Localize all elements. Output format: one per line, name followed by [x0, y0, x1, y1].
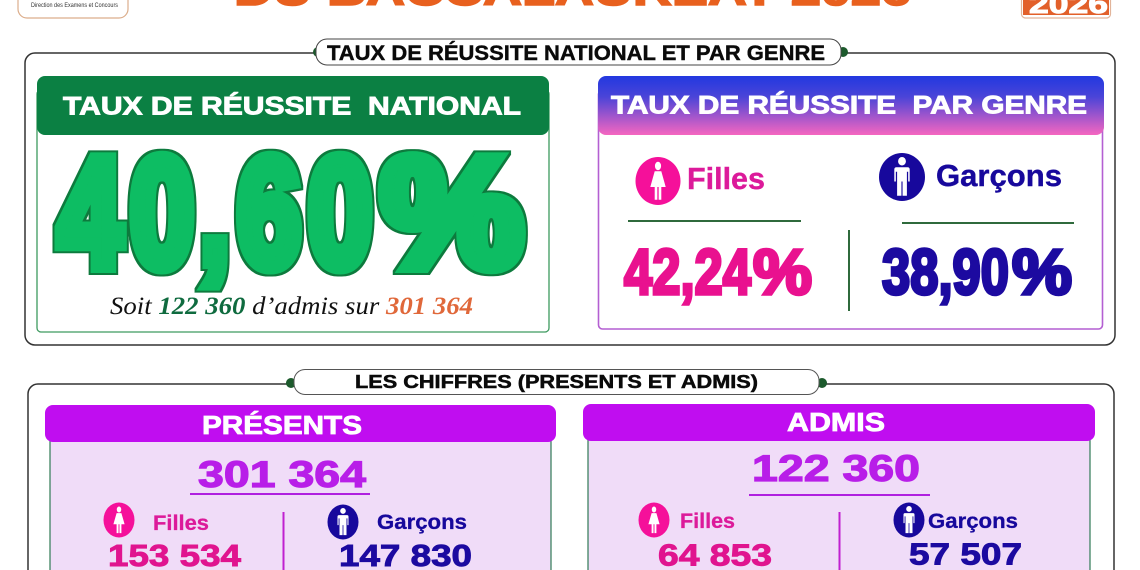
section heading: les chiffres	[286, 370, 827, 394]
icon: boy	[328, 504, 358, 540]
icon: boy	[879, 153, 925, 201]
label: garçons: Garçons	[928, 510, 1018, 533]
year badge	[1022, 0, 1110, 19]
admis header: ADMIS	[787, 407, 885, 437]
label: garçons: Garçons	[936, 158, 1062, 193]
panel: taux par genre	[598, 76, 1104, 329]
icon: girl	[104, 502, 134, 538]
label: filles: Filles	[680, 510, 735, 533]
national rate value	[58, 125, 523, 299]
logo card: Direction des Examens et Concours	[31, 3, 118, 9]
logo card	[18, 0, 128, 18]
national counts caption: Soit 122 360 d’admis sur 301 364	[110, 293, 473, 320]
panel: admis	[583, 404, 1095, 570]
admis header	[583, 404, 1095, 441]
panel: taux de réussite national et par genre	[25, 39, 1115, 345]
value: filles rate: 42,24	[624, 236, 751, 308]
label: filles: Filles	[153, 512, 209, 535]
national header	[37, 76, 549, 135]
admis total: 122 360	[752, 448, 920, 489]
panel: présents	[45, 405, 556, 570]
icon: girl	[638, 502, 670, 538]
section heading: les chiffres: LES CHIFFRES (PRESENTS ET ADMIS)	[355, 372, 758, 392]
section heading: taux de réussite: TAUX DE RÉUSSITE NATIONAL ET PAR GENRE	[327, 42, 825, 65]
panel: les chiffres	[28, 370, 1114, 570]
présents total: 301 364	[198, 454, 367, 495]
value: filles rate: %	[753, 236, 812, 308]
label: garçons: Garçons	[377, 511, 467, 534]
gender header	[598, 76, 1104, 135]
national rate value: %	[381, 127, 523, 299]
présents header: PRÉSENTS	[202, 410, 362, 440]
national header: TAUX DE RÉUSSITE NATIONAL	[63, 92, 521, 120]
icon: boy	[894, 502, 924, 538]
panel: taux national	[37, 76, 549, 332]
national rate value: ,	[200, 136, 229, 293]
value: garçons rate: 38,90	[882, 236, 1009, 308]
national rate value: 40	[58, 125, 194, 299]
gender header: TAUX DE RÉUSSITE PAR GENRE	[611, 90, 1087, 120]
label: filles: Filles	[687, 161, 765, 196]
icon: girl	[636, 157, 680, 205]
national rate value: 60	[237, 125, 372, 299]
présents header	[45, 405, 556, 442]
value: garçons rate: %	[1012, 236, 1072, 308]
